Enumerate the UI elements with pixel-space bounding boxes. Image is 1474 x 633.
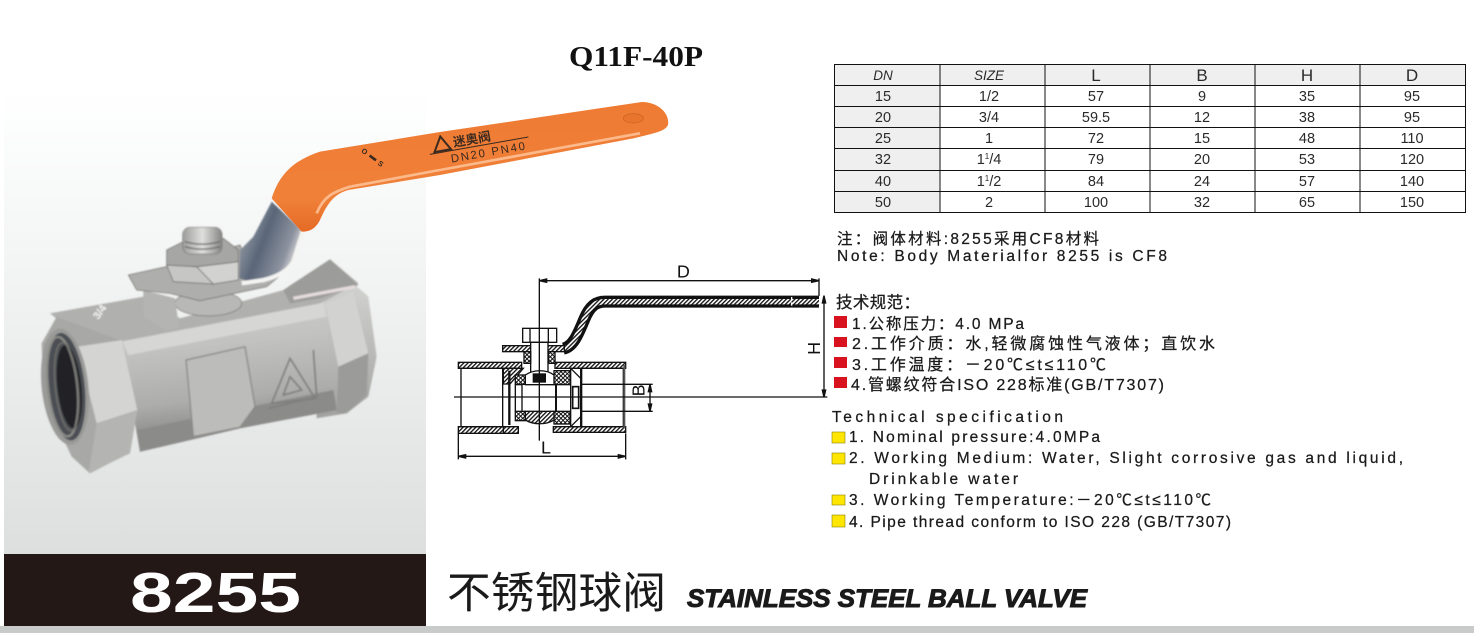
table rows: /2	[989, 174, 1001, 190]
note Chinese: 注：阀体材料:8255采用CF8材料	[837, 230, 1099, 248]
English spec items: 2. Working Medium: Water, Slight corrosive gas and liquid,	[849, 450, 1403, 467]
table rows: 79	[1088, 152, 1104, 168]
table header: L	[1091, 66, 1101, 85]
table rows: 20	[1194, 152, 1210, 168]
valve right hex end	[315, 283, 377, 418]
table rows: 84	[1088, 174, 1104, 190]
model number banner	[4, 554, 426, 626]
Chinese spec items: 2.工作介质：水,轻微腐蚀性气液体；直饮水	[852, 335, 1215, 353]
table header: D	[1406, 66, 1418, 85]
body underside shadow	[137, 390, 337, 452]
dimension D: D	[677, 262, 690, 282]
product name Chinese: 不锈钢球阀	[447, 570, 666, 618]
handle open-shut mark: S	[376, 159, 385, 169]
product photo: ball valve	[36, 102, 668, 473]
lever arm bright edge	[242, 232, 303, 283]
table rows: 1/2	[979, 89, 999, 105]
handle brand print: DN20 PN40	[450, 141, 526, 166]
English spec items: Drinkable water	[869, 471, 1018, 488]
dimension H: H	[804, 342, 824, 355]
English spec items: 4. Pipe thread conform to ISO 228 (GB/T7307)	[849, 514, 1231, 531]
table rows: /4	[989, 152, 1001, 168]
dimension H	[804, 296, 826, 397]
product name English: STAINLESS STEEL BALL VALVE	[687, 585, 1088, 613]
hex nut	[167, 238, 238, 284]
photo background panel	[4, 90, 426, 554]
Chinese spec bullets	[834, 316, 847, 388]
dimension L	[458, 433, 626, 459]
table rows: 95	[1404, 89, 1420, 105]
orange handle grip	[272, 102, 668, 232]
table rows: 20	[875, 110, 891, 126]
valve left hex end	[42, 317, 135, 473]
table rows: 1	[977, 174, 985, 190]
table rows: 120	[1400, 152, 1424, 168]
valve size marking: 3/4	[91, 303, 109, 322]
steel lever arm	[239, 202, 302, 283]
table rows: 1	[985, 174, 990, 183]
bolt	[183, 227, 222, 254]
bottom grey band	[0, 626, 1474, 633]
table rows: 150	[1400, 195, 1424, 211]
stem washer	[175, 291, 242, 316]
table rows: 110	[1400, 131, 1424, 147]
table rows: 40	[875, 174, 891, 190]
table rows: 25	[875, 131, 891, 147]
dimension table	[834, 64, 1466, 213]
body highlight band	[122, 300, 327, 355]
table header: H	[1301, 66, 1313, 85]
valve body logo	[268, 350, 317, 408]
Chinese spec heading: 技术规范：	[836, 293, 920, 312]
English technical specification	[832, 409, 1403, 531]
table rows: 48	[1299, 131, 1315, 147]
table rows: 32	[875, 152, 891, 168]
table rows: 32	[1194, 195, 1210, 211]
technical section drawing	[454, 262, 827, 459]
table rows: 59.5	[1082, 110, 1110, 126]
valve body section	[458, 362, 626, 433]
valve top surface	[50, 259, 358, 342]
valve threaded opening	[36, 326, 94, 447]
Chinese spec items: 3.工作温度：－20℃≤t≤110℃	[852, 356, 1106, 374]
dimension B: B	[629, 384, 649, 396]
handle hole	[623, 114, 643, 123]
table rows: 3/4	[979, 110, 999, 126]
handle open-shut mark	[360, 146, 385, 169]
valve metal parts	[36, 202, 377, 473]
English spec bullets	[832, 432, 845, 527]
valve centre pad	[186, 347, 255, 437]
table header: B	[1196, 66, 1208, 85]
table rows: 1	[985, 152, 990, 161]
table grid	[834, 64, 1466, 213]
stop tab	[143, 290, 179, 331]
Chinese spec items	[851, 315, 1215, 394]
dimension L: L	[541, 437, 551, 457]
table rows: 57	[1299, 174, 1315, 190]
top edge highlight	[293, 287, 355, 298]
handle brand print: 迷奥阀	[452, 129, 492, 150]
English spec items: 3. Working Temperature:－20℃≤t≤110℃	[849, 492, 1211, 509]
Chinese spec items: 4.管螺纹符合ISO 228标准(GB/T7307)	[851, 376, 1164, 394]
centre lines	[454, 278, 827, 441]
table rows: 57	[1088, 89, 1104, 105]
table rows: 2	[985, 195, 993, 211]
bolt and nut	[523, 328, 557, 381]
handle brand print	[427, 121, 531, 169]
ball and seats	[515, 371, 570, 424]
table rows: 38	[1299, 110, 1315, 126]
table rows: 35	[1299, 89, 1315, 105]
dimension D	[539, 262, 819, 296]
English spec items	[849, 429, 1403, 531]
handle highlight	[317, 133, 640, 213]
table rows: 53	[1299, 152, 1315, 168]
English spec heading: Technical specification	[832, 409, 1063, 426]
dimension B	[580, 384, 653, 411]
table rows: 15	[875, 89, 891, 105]
table header	[873, 66, 1418, 85]
table rows	[875, 89, 1424, 211]
table rows: 1	[985, 131, 993, 147]
model title: Q11F-40P	[569, 42, 703, 73]
table rows: 65	[1299, 195, 1315, 211]
table rows: 50	[875, 195, 891, 211]
table rows: 24	[1194, 174, 1210, 190]
Chinese spec items: 1.公称压力：4.0 MPa	[852, 315, 1024, 333]
table rows: 15	[1194, 131, 1210, 147]
valve central body	[120, 300, 337, 452]
table rows: 72	[1088, 131, 1104, 147]
table header: DN	[873, 68, 893, 83]
material note	[837, 230, 1167, 265]
table rows: 9	[1198, 89, 1206, 105]
handle open-shut mark: O	[360, 146, 370, 157]
table rows: 140	[1400, 174, 1424, 190]
English spec items: 1. Nominal pressure:4.0MPa	[849, 429, 1100, 446]
table rows: 1	[977, 152, 985, 168]
model number: 8255	[130, 561, 301, 625]
table rows: 12	[1194, 110, 1210, 126]
note English: Note: Body Materialfor 8255 is CF8	[837, 248, 1167, 265]
lever in section	[503, 292, 819, 352]
table rows: 95	[1404, 110, 1420, 126]
Chinese technical specification	[834, 293, 1215, 394]
table shading	[834, 64, 1465, 86]
table rows: 100	[1084, 195, 1108, 211]
table header: SIZE	[974, 68, 1005, 83]
lever plate	[128, 245, 287, 301]
